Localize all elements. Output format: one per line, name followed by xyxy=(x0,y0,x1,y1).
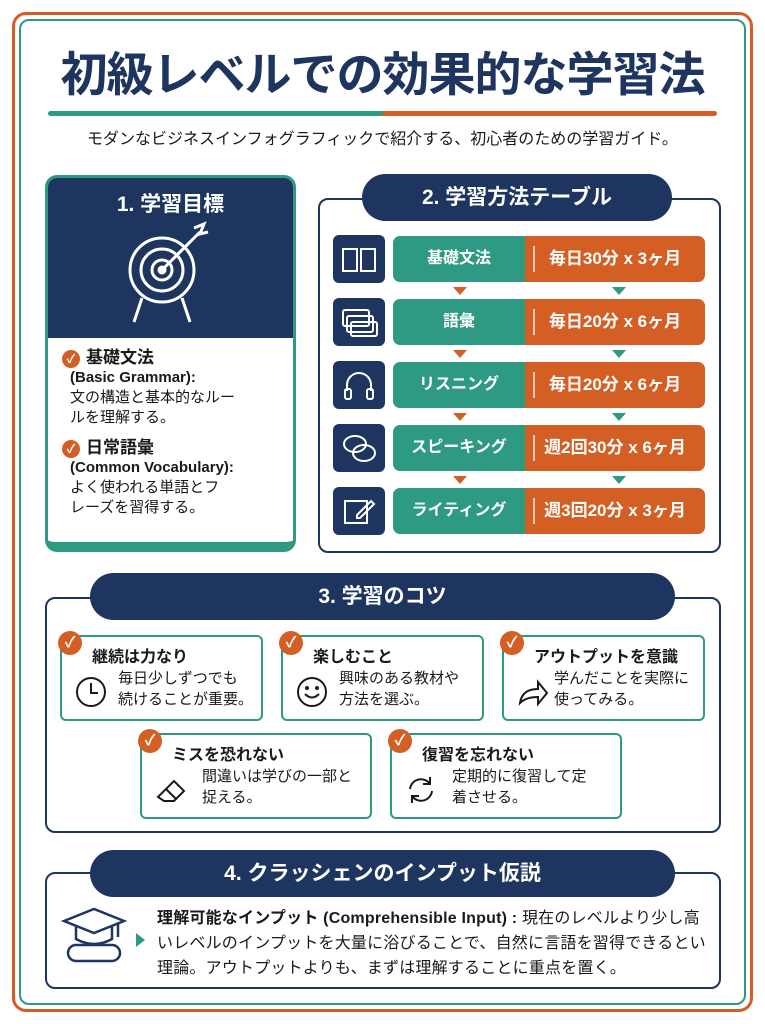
Krashen text: 理論。アウトプットよりも、まずは理解することに重点を置く。 xyxy=(157,960,626,977)
arrows between rows xyxy=(453,287,467,295)
tip 5: 着させる。 xyxy=(452,789,527,806)
tip 5: 復習を忘れない xyxy=(422,747,534,764)
goal items: レーズを習得する。 xyxy=(70,499,204,516)
panel 1: goals xyxy=(45,175,296,552)
goal items: ✓ xyxy=(67,352,75,366)
tip 2: 方法を選ぶ。 xyxy=(339,691,429,708)
goal items: よく使われる単語とフ xyxy=(70,479,219,496)
Krashen text: いレベルのインプットを大量に浴びることで、自然に言語を習得できるとい xyxy=(157,935,706,952)
icon: graduation cap xyxy=(60,908,128,962)
text: 毎日20分 x 6ヶ月 xyxy=(549,375,681,394)
icons xyxy=(333,235,385,283)
tip 5: ✓ xyxy=(395,732,405,749)
icon: target xyxy=(128,221,208,322)
text: ライティング xyxy=(412,502,506,519)
tip 1: ✓ xyxy=(65,634,75,651)
tip 2: 興味のある教材や xyxy=(339,670,459,687)
text: 2. 学習方法テーブル xyxy=(422,186,612,209)
tip 2: ✓ xyxy=(286,634,296,651)
text: 3. 学習のコツ xyxy=(318,585,447,608)
tip 3 xyxy=(502,635,705,721)
text: 週3回20分 x 3ヶ月 xyxy=(544,501,686,520)
goal items: 文の構造と基本的なルー xyxy=(70,389,235,406)
tip 2 xyxy=(281,635,484,721)
panel 4: Krashen xyxy=(45,872,721,989)
goal items: ルを理解する。 xyxy=(70,409,175,426)
title underline xyxy=(48,111,717,116)
goal items: 日常語彙 xyxy=(86,438,154,457)
rows: 毎日30分 x 3ヶ月 xyxy=(549,249,681,268)
panel 1 header: 1. 学習目標 xyxy=(117,193,224,216)
title: 初級レベルでの効果的な学習法 xyxy=(60,48,704,101)
tip 3: ✓ xyxy=(507,634,517,651)
tip 1: 毎日少しずつでも xyxy=(118,670,238,687)
Krashen text: 理解可能なインプット (Comprehensible Input) : 現在のレベルより少し高 xyxy=(157,910,700,927)
panel 1 header xyxy=(48,178,293,338)
text: 週2回30分 x 6ヶ月 xyxy=(544,438,686,457)
tip 4: ミスを恐れない xyxy=(172,747,284,764)
text: 4. クラッシェンのインプット仮説 xyxy=(224,862,541,885)
goal items: ✓ xyxy=(67,442,75,456)
arrow xyxy=(136,933,145,947)
subtitle: モダンなビジネスインフォグラフィックで紹介する、初心者のための学習ガイド。 xyxy=(87,131,678,148)
tip 4 xyxy=(140,733,372,819)
text: リスニング xyxy=(419,376,499,393)
rows: 基礎文法 xyxy=(427,250,491,267)
text: スピーキング xyxy=(411,439,507,456)
tip 3: 使ってみる。 xyxy=(554,691,643,708)
tip 1 xyxy=(60,635,263,721)
Krashen text xyxy=(157,909,706,977)
tip 5: 定期的に復習して定 xyxy=(452,768,587,785)
goal items: 基礎文法 xyxy=(86,348,154,367)
panel 2: methods table xyxy=(318,198,721,553)
tip 5 xyxy=(390,733,622,819)
text: 毎日20分 x 6ヶ月 xyxy=(549,312,681,331)
text: 語彙 xyxy=(443,313,475,330)
tip 4: 間違いは学びの一部と xyxy=(202,768,352,785)
rows xyxy=(393,236,705,282)
tip 4: ✓ xyxy=(145,732,155,749)
tip 1: 続けることが重要。 xyxy=(118,691,253,708)
panel 3: tips xyxy=(45,597,721,833)
goal items: (Common Vocabulary): xyxy=(70,459,234,476)
tip 1: 継続は力なり xyxy=(92,649,188,666)
goal items xyxy=(62,348,235,516)
tip 2: 楽しむこと xyxy=(313,649,393,666)
tip 3: アウトプットを意識 xyxy=(534,649,678,666)
goal items: (Basic Grammar): xyxy=(70,369,196,386)
tip 4: 捉える。 xyxy=(202,789,262,806)
tip 3: 学んだことを実際に xyxy=(554,670,689,687)
